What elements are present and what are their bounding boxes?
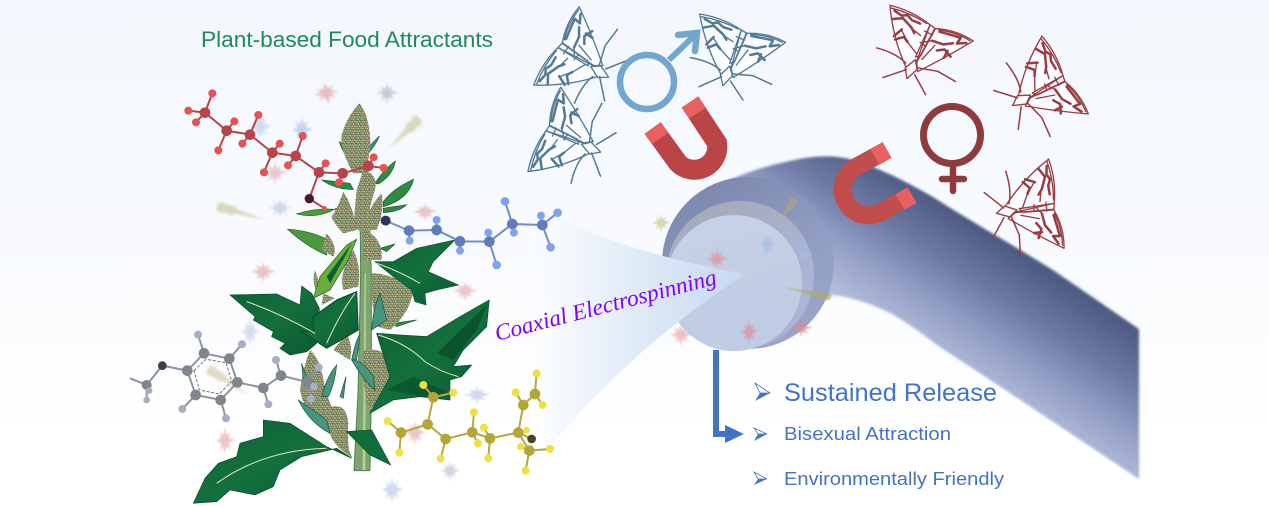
teal small leaves [298, 293, 387, 433]
blue molecule [381, 197, 562, 269]
electrospinning cone [520, 214, 745, 480]
yellow molecule [384, 369, 554, 475]
stem [354, 190, 371, 471]
left large leaf [230, 286, 319, 355]
center leaf [302, 292, 358, 348]
middle layer [666, 201, 814, 349]
property: bisexual attraction: Bisexual Attraction [784, 424, 951, 444]
released particles [205, 81, 831, 503]
upper right leaf [375, 240, 458, 305]
red molecule [184, 89, 388, 211]
bullet: sustained release [755, 383, 770, 401]
female moths [873, 4, 1107, 275]
moth: male top right [690, 14, 786, 100]
outer sheath ring [662, 177, 834, 349]
property: environmentally friendly: Environmentally Friendly [784, 469, 1004, 489]
bullet: bisexual attraction [754, 428, 767, 441]
title: Plant-based Food Attractants [201, 27, 493, 52]
moth: male bottom left [527, 86, 618, 185]
right large leaf [370, 300, 489, 413]
process label: Coaxial Electrospinning [492, 265, 719, 346]
arrow: tube to properties [713, 350, 744, 443]
moth: male top left [532, 1, 636, 112]
magnet: female side [843, 150, 912, 215]
male symbol [620, 33, 697, 109]
magnet: male side [653, 102, 717, 170]
small upper leaves [288, 136, 417, 327]
lower left leaf [193, 420, 352, 503]
female symbol [924, 106, 980, 191]
core layer [666, 215, 802, 351]
gray molecule [130, 331, 323, 422]
fiber tube [662, 156, 1139, 479]
upper center leaf [313, 239, 357, 298]
flower clusters [300, 103, 413, 458]
tube body [690, 156, 1139, 479]
moth: female right [979, 30, 1107, 157]
moth: female top [873, 4, 976, 98]
lower center leaf [347, 430, 391, 465]
moth: female lower [968, 151, 1089, 275]
male moths [527, 1, 786, 185]
property: sustained release: Sustained Release [784, 379, 997, 407]
bullet: environmentally friendly [754, 472, 767, 485]
leaf midribs [217, 263, 458, 483]
plant illustration [193, 103, 489, 503]
